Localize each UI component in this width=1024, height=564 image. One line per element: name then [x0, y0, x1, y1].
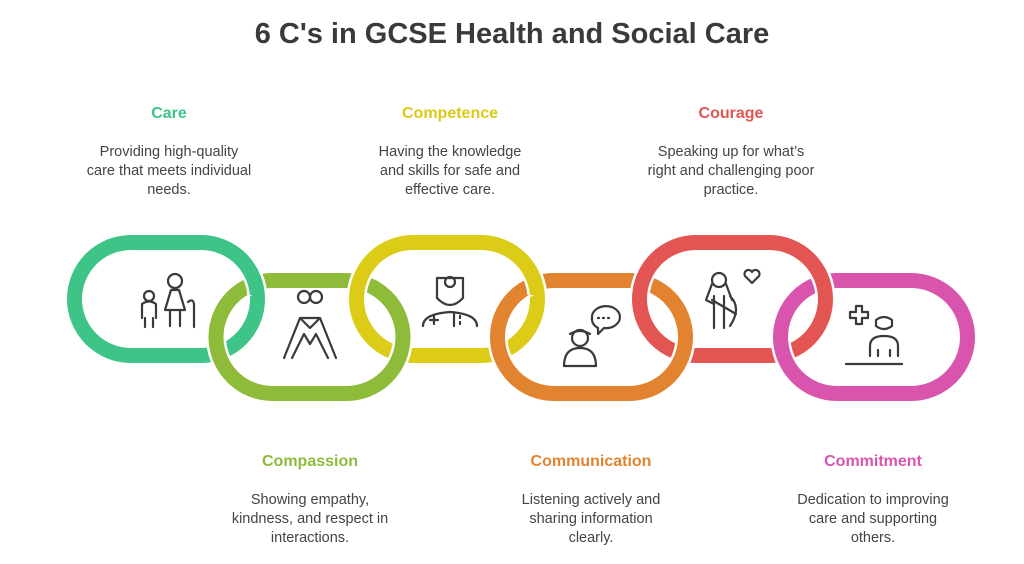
chain of links [67, 235, 975, 401]
text: Courage: Courage [699, 105, 763, 122]
text: Care: care that meets individual [87, 163, 251, 179]
text: Compassion: Showing empathy, [251, 492, 369, 508]
text: Communication: sharing information [529, 511, 653, 527]
text: Commitment: Commitment [824, 453, 922, 470]
icon: child and elder [142, 274, 194, 327]
link 4 overlap [665, 330, 694, 370]
text: Care: needs. [147, 182, 191, 198]
text: Compassion: kindness, and respect in [232, 511, 388, 527]
text: Commitment [797, 453, 949, 546]
text: Courage: right and challenging poor [648, 163, 814, 179]
link 1 green [74, 242, 258, 356]
text: Competence: and skills for safe and [380, 163, 520, 179]
text: Communication: Listening actively and [522, 492, 660, 508]
icon: archer with heart [706, 270, 760, 328]
text: Compassion [232, 453, 388, 546]
text: Competence: Having the knowledge [379, 144, 521, 160]
text: Competence: Competence [402, 105, 498, 122]
link 2 overlap [382, 330, 412, 370]
text: Commitment: Dedication to improving [797, 492, 949, 508]
text: Courage: Speaking up for what’s [658, 144, 804, 160]
text: Compassion: interactions. [271, 530, 349, 546]
text: Care: Care [151, 105, 187, 122]
link 5 red [640, 242, 826, 356]
icon: doctor [423, 277, 477, 326]
link 4 orange [498, 280, 686, 394]
link 3 overlap [524, 255, 547, 295]
text: Courage: practice. [704, 182, 758, 198]
text: Care: Providing high-quality [100, 144, 238, 160]
icon: hug [284, 291, 336, 358]
text: Communication: clearly. [569, 530, 613, 546]
text: Competence: effective care. [405, 182, 495, 198]
icon: speaker with bubble [564, 306, 620, 366]
text: Competence [379, 105, 521, 198]
text: Care [87, 105, 251, 198]
link 5 overlap [796, 255, 834, 295]
link 1 overlap [230, 255, 267, 295]
link 2 lime [216, 280, 403, 394]
text: Compassion: Compassion [262, 453, 358, 470]
text: Commitment: care and supporting [809, 511, 937, 527]
icon: nurse with cross [846, 306, 902, 364]
text: Commitment: others. [851, 530, 895, 546]
text: Communication [522, 453, 660, 546]
link 3 yellow [356, 242, 538, 356]
text: Communication: Communication [531, 453, 651, 470]
link 6 pink [780, 280, 968, 394]
text: Courage [648, 105, 814, 198]
title: 6 C's in GCSE Health and Social Care [255, 18, 769, 50]
